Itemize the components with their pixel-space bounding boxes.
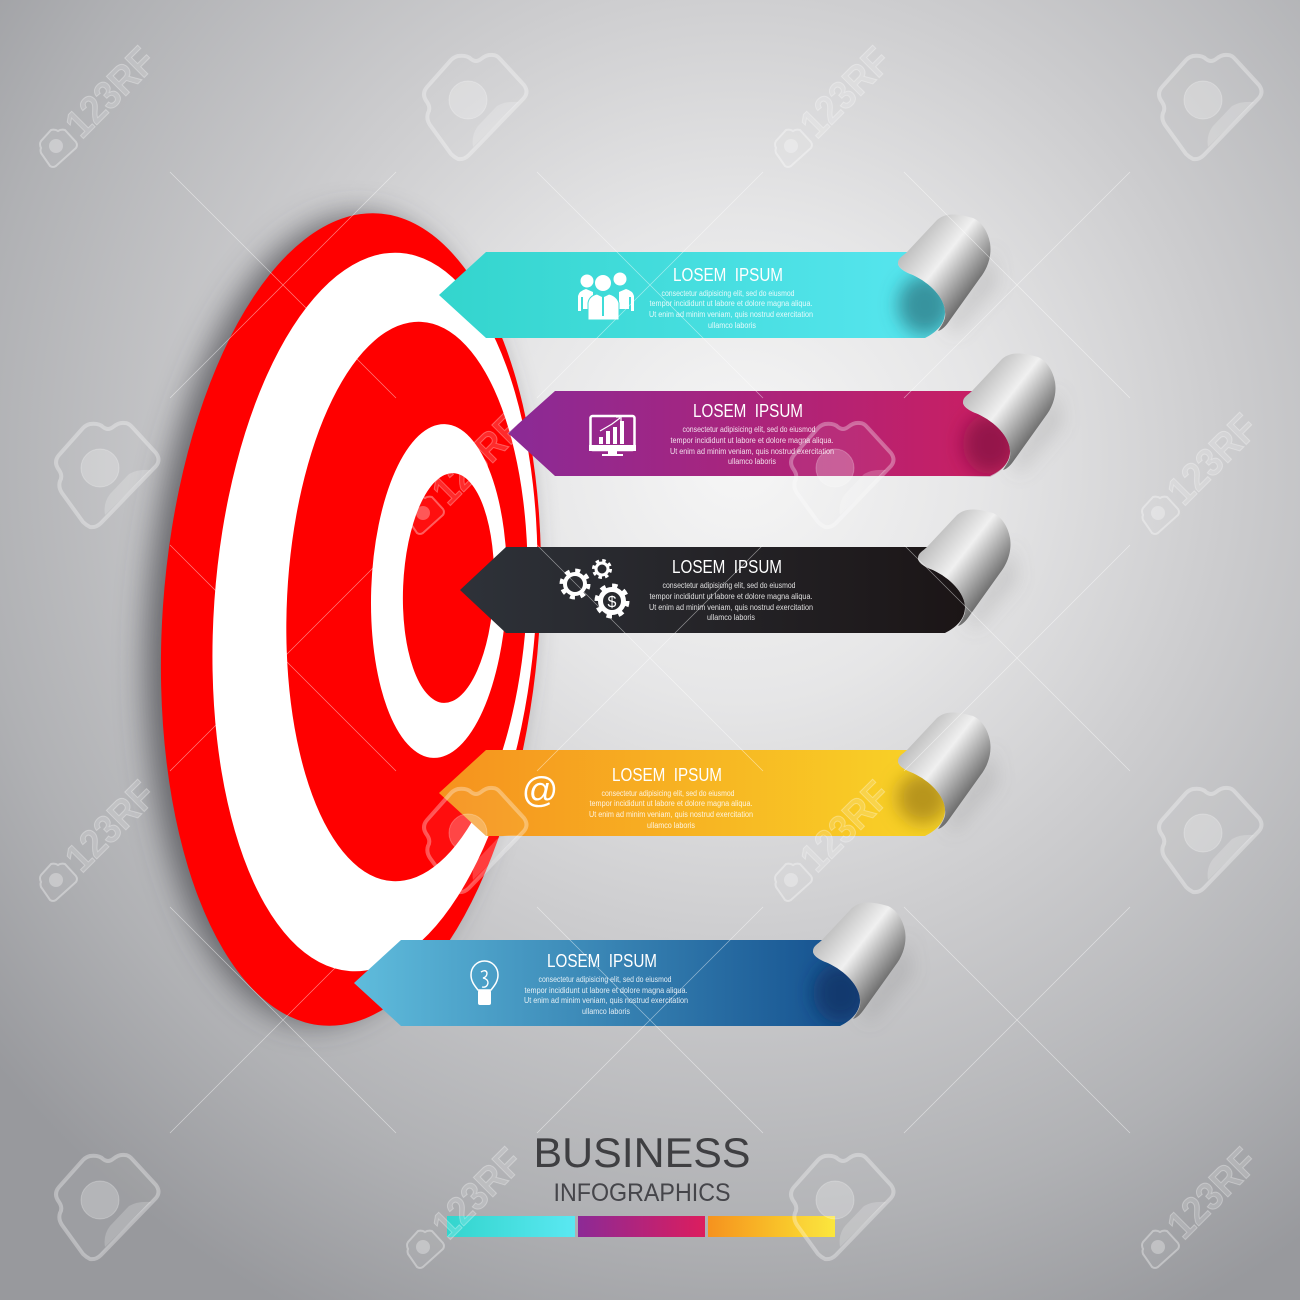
watermark text: 123RF: [424, 1140, 531, 1247]
banner 4 text: consectetur adipisicing elit, sed do eiusmod: [602, 789, 734, 798]
banner 2 text: Ut enim ad minim veniam, quis nostrud exercitation: [670, 447, 834, 456]
banner 5 title: LOSEM IPSUM: [547, 951, 657, 971]
banner 5 icon: light bulb: [471, 961, 498, 1005]
watermark text: 123RF: [1159, 406, 1266, 513]
banner 4 title: LOSEM IPSUM: [612, 765, 722, 785]
banner 5 text: ullamco laboris: [582, 1007, 630, 1016]
banner 3 ribbon and curl: [460, 509, 1018, 633]
decorative crosses: [170, 172, 1130, 1133]
watermark text: 123RF: [424, 406, 531, 513]
title: business: BUSINESS: [534, 1129, 750, 1176]
banner 3 text: [649, 581, 813, 622]
banner 5: blue: [354, 902, 913, 1026]
banner 5 text: Ut enim ad minim veniam, quis nostrud exercitation: [524, 996, 688, 1005]
watermark text: 123RF: [792, 773, 899, 880]
banner 2 text: tempor incididunt ut labore et dolore magna aliqua.: [670, 436, 834, 445]
banner 2 icon: chart monitor: [589, 416, 636, 456]
banner 1 text: ullamco laboris: [708, 321, 756, 330]
banner 4: orange: [439, 712, 998, 836]
banner 4 icon: at sign: @: [522, 769, 558, 810]
banner 2 text: [670, 425, 834, 466]
banner 2 ribbon and curl: [508, 353, 1063, 476]
banner 5 text: [524, 975, 688, 1016]
watermark text: 123RF: [792, 39, 899, 146]
banner 5 text: consectetur adipisicing elit, sed do eiusmod: [538, 975, 672, 984]
banner 1 ribbon and curl: [439, 214, 998, 338]
banner 4 text: tempor incididunt ut labore et dolore magna aliqua.: [590, 799, 752, 808]
banner 1 text: consectetur adipisicing elit, sed do eiusmod: [662, 289, 794, 298]
banner 4 text: ullamco laboris: [647, 821, 695, 830]
banner 1 text: Ut enim ad minim veniam, quis nostrud exercitation: [649, 310, 813, 319]
banner 3 icon: gears: $: [608, 594, 617, 611]
target: concentric rings: [135, 201, 567, 1038]
watermark text: 123RF: [57, 39, 164, 146]
banner 1 text: [649, 289, 813, 330]
banner 4 ribbon and curl: [439, 712, 998, 836]
banner 2: purple: [508, 353, 1063, 476]
banner 2 text: consectetur adipisicing elit, sed do eiusmod: [682, 425, 816, 434]
banner 4 text: Ut enim ad minim veniam, quis nostrud exercitation: [589, 810, 753, 819]
subtitle: infographics: INFOGRAPHICS: [554, 1179, 730, 1207]
banner 3 text: Ut enim ad minim veniam, quis nostrud exercitation: [649, 603, 813, 612]
banner 3 icon: gears: [562, 560, 628, 616]
banner 3 text: ullamco laboris: [707, 613, 755, 622]
target shadow: [120, 202, 552, 1036]
banner 3 title: LOSEM IPSUM: [672, 557, 782, 577]
banner 2 text: ullamco laboris: [728, 457, 776, 466]
watermark text: 123RF: [57, 773, 164, 880]
banner 1 icon: team: [578, 272, 634, 320]
banner 1 text: tempor incididunt ut labore et dolore magna aliqua.: [650, 299, 812, 308]
banner 1 title: LOSEM IPSUM: [673, 265, 783, 285]
banner 4 text: [589, 789, 753, 830]
banner 5 ribbon and curl: [354, 902, 913, 1026]
colour legend bars: [447, 1216, 835, 1237]
banner 3: black: [460, 509, 1018, 633]
banner 3 text: tempor incididunt ut labore et dolore magna aliqua.: [650, 592, 812, 601]
watermark text: 123RF: [1159, 1140, 1266, 1247]
banner 2 title: LOSEM IPSUM: [693, 401, 803, 421]
banner 5 text: tempor incididunt ut labore et dolore magna aliqua.: [524, 986, 688, 995]
banner 3 text: consectetur adipisicing elit, sed do eiusmod: [662, 581, 796, 590]
banner 1: teal: [439, 214, 998, 338]
